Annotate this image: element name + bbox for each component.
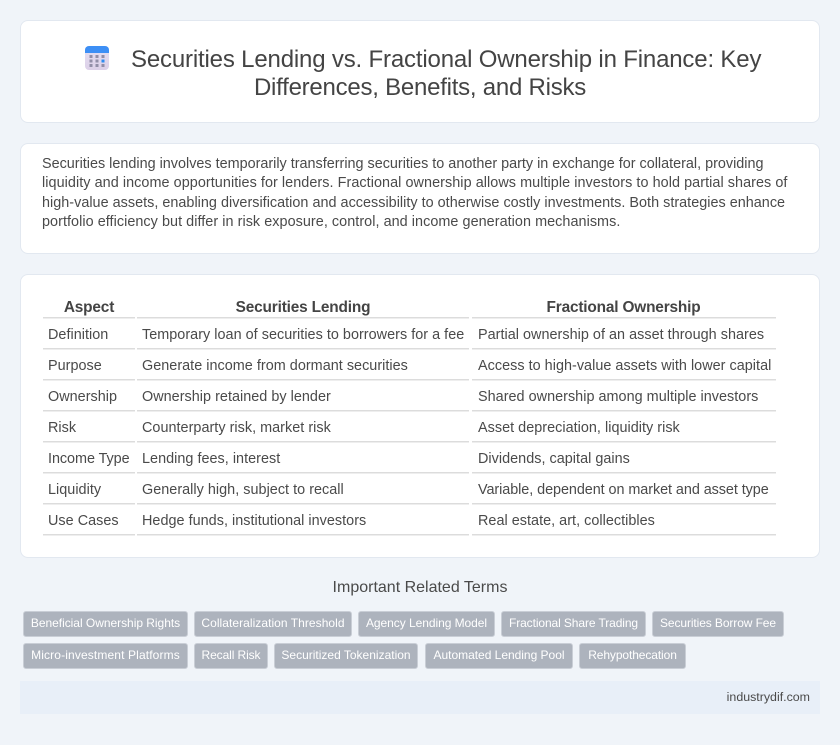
tag: Securities Borrow Fee bbox=[660, 616, 776, 630]
tag: Securitized Tokenization bbox=[281, 648, 411, 662]
text block: intro: high-value assets, enabling diversification and accessibility to otherwise costly investments. Both strategies enhance bbox=[42, 195, 785, 211]
tag bbox=[194, 643, 268, 669]
tag: Recall Risk bbox=[202, 648, 260, 662]
row: definition: Partial ownership of an asset through shares bbox=[478, 327, 764, 343]
row: income type bbox=[48, 451, 630, 467]
text block: intro bbox=[42, 156, 788, 230]
heading: important related terms: Important Related Terms bbox=[333, 579, 507, 596]
tag bbox=[23, 643, 188, 669]
row: income type: Dividends, capital gains bbox=[478, 451, 630, 467]
row: purpose: Purpose bbox=[48, 358, 102, 374]
tag bbox=[652, 611, 784, 637]
row: use cases bbox=[48, 513, 655, 529]
row: definition: Definition bbox=[48, 327, 108, 343]
row: use cases: Use Cases bbox=[48, 513, 119, 529]
row: definition bbox=[48, 327, 764, 343]
row: ownership: Shared ownership among multiple investors bbox=[478, 389, 758, 405]
table header: fractional ownership: Fractional Ownership bbox=[547, 299, 700, 316]
tag bbox=[194, 611, 352, 637]
tag bbox=[579, 643, 686, 669]
tag: Rehypothecation bbox=[588, 648, 677, 662]
text block: intro: portfolio efficiency but differ in risk exposure, control, and income generation mechanisms. bbox=[42, 214, 620, 230]
row: purpose bbox=[48, 358, 771, 374]
row: liquidity: Variable, dependent on market and asset type bbox=[478, 482, 769, 498]
row: risk bbox=[48, 420, 680, 436]
title line 2: Differences, Benefits, and Risks bbox=[254, 74, 586, 101]
row: risk: Counterparty risk, market risk bbox=[142, 420, 331, 436]
row: purpose: Access to high-value assets with lower capital bbox=[478, 358, 771, 374]
row: ownership bbox=[48, 389, 758, 405]
table header: aspect: Aspect bbox=[64, 299, 114, 316]
tag: Micro-investment Platforms bbox=[31, 648, 180, 662]
row: liquidity bbox=[48, 482, 769, 498]
tag: Beneficial Ownership Rights bbox=[31, 616, 180, 630]
footer bar bbox=[20, 681, 820, 714]
row: ownership: Ownership retained by lender bbox=[142, 389, 331, 405]
tag bbox=[274, 643, 418, 669]
row: ownership: Ownership bbox=[48, 389, 117, 405]
panel: intro card bbox=[20, 143, 820, 254]
row: use cases: Real estate, art, collectibles bbox=[478, 513, 655, 529]
text block: intro: liquidity and income opportunities for lenders. Fractional ownership allows multiple investors to hold partial shares of bbox=[42, 175, 788, 191]
tag bbox=[23, 611, 188, 637]
tag bbox=[501, 611, 646, 637]
row: income type: Lending fees, interest bbox=[142, 451, 280, 467]
tag group: related terms bbox=[23, 611, 784, 669]
title bbox=[131, 46, 762, 101]
row: risk: Risk bbox=[48, 420, 76, 436]
text block: intro: Securities lending involves temporarily transferring securities to another party in exchange for collateral, providing bbox=[42, 156, 764, 172]
table header: securities lending: Securities Lending bbox=[236, 299, 370, 316]
row: income type: Income Type bbox=[48, 451, 130, 467]
row: purpose: Generate income from dormant securities bbox=[142, 358, 408, 374]
tag: Agency Lending Model bbox=[366, 616, 487, 630]
title line 1: Securities Lending vs. Fractional Ownership in Finance: Key bbox=[131, 46, 761, 73]
panel: comparison table bbox=[20, 274, 820, 558]
tag: Fractional Share Trading bbox=[509, 616, 638, 630]
icon: calendar grid bbox=[85, 46, 109, 70]
footer credit: industrydif.com bbox=[727, 690, 810, 704]
row: liquidity: Liquidity bbox=[48, 482, 101, 498]
panel: title card bbox=[20, 20, 820, 123]
tag: Collateralization Threshold bbox=[201, 616, 345, 630]
tag: Automated Lending Pool bbox=[434, 648, 564, 662]
row: liquidity: Generally high, subject to recall bbox=[142, 482, 344, 498]
row: use cases: Hedge funds, institutional investors bbox=[142, 513, 366, 529]
tag bbox=[425, 643, 573, 669]
tag bbox=[358, 611, 495, 637]
row: definition: Temporary loan of securities to borrowers for a fee bbox=[142, 327, 464, 343]
row: risk: Asset depreciation, liquidity risk bbox=[478, 420, 680, 436]
